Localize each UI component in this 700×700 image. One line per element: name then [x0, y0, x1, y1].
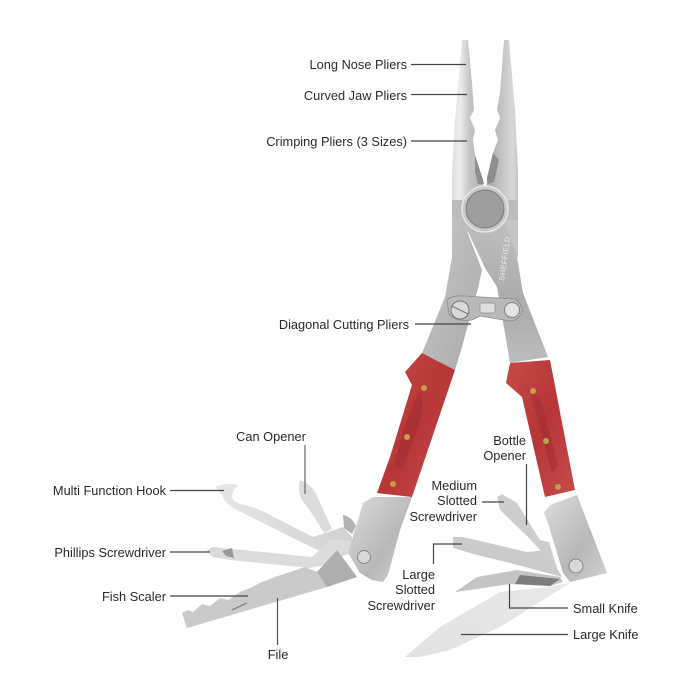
- large slotted screwdriver: [453, 537, 562, 577]
- large knife: [405, 583, 570, 657]
- label: small knife: [510, 584, 638, 616]
- label: can opener: Can Opener: [236, 429, 307, 444]
- label: fish scaler: Fish Scaler: [102, 589, 167, 604]
- multi function hook: [215, 484, 352, 552]
- label: medium slotted screwdriver: [409, 478, 504, 524]
- left red wood handle: [377, 353, 455, 497]
- left plier jaw: [452, 40, 484, 200]
- label: medium slotted screwdriver: Medium: [431, 478, 477, 493]
- left arm: [422, 218, 482, 370]
- label: small knife: Small Knife: [573, 601, 638, 616]
- right arm: [461, 217, 548, 363]
- label: bottle opener: Bottle: [493, 433, 526, 448]
- right arm back plate: [505, 220, 518, 262]
- crimping teeth shadows: [475, 153, 499, 184]
- left housing screw: [358, 550, 370, 564]
- file with fish scaler teeth: [182, 550, 357, 628]
- label: bottle opener: Opener: [483, 448, 527, 463]
- label: medium slotted screwdriver: Screwdriver: [409, 509, 478, 524]
- brand stamp: SHEFFIELD: [497, 235, 512, 281]
- left tools: [182, 480, 412, 628]
- label: bottle opener: [483, 433, 527, 525]
- small knife: [455, 570, 563, 592]
- pliers body: [377, 40, 575, 497]
- right tools: [405, 494, 607, 657]
- label: long nose pliers: Long Nose Pliers: [310, 57, 407, 72]
- shoulder behind pivot: [452, 200, 518, 232]
- left housing: [348, 497, 412, 582]
- label: diagonal cutting pliers: Diagonal Cutting Pliers: [279, 317, 409, 332]
- label: large slotted screwdriver: Screwdriver: [367, 598, 436, 613]
- phillips screwdriver: [207, 540, 352, 568]
- right housing: [544, 495, 607, 582]
- label: large slotted screwdriver: [367, 544, 462, 613]
- label: curved jaw pliers: Curved Jaw Pliers: [304, 88, 407, 103]
- medium slotted screwdriver: [497, 494, 557, 568]
- label: medium slotted screwdriver: Slotted: [437, 493, 477, 508]
- label: large knife: Large Knife: [573, 627, 638, 642]
- label: file: [268, 598, 288, 662]
- label: file: File: [268, 647, 288, 662]
- right housing screw: [569, 559, 583, 573]
- diagonal cutter link: [447, 296, 522, 321]
- label: crimping pliers: Crimping Pliers (3 Sizes): [266, 134, 407, 149]
- label: multi function hook: Multi Function Hook: [53, 483, 167, 498]
- small bottle tip behind housing: [343, 515, 356, 534]
- can opener: [299, 480, 332, 533]
- label: large slotted screwdriver: Slotted: [395, 582, 435, 597]
- label: phillips screwdriver: Phillips Screwdriver: [54, 545, 167, 560]
- label: can opener: [236, 429, 307, 494]
- right red wood handle: [506, 360, 575, 497]
- label: large slotted screwdriver: Large: [402, 567, 435, 582]
- pivot bolt: [462, 186, 508, 232]
- right plier jaw: [486, 40, 518, 200]
